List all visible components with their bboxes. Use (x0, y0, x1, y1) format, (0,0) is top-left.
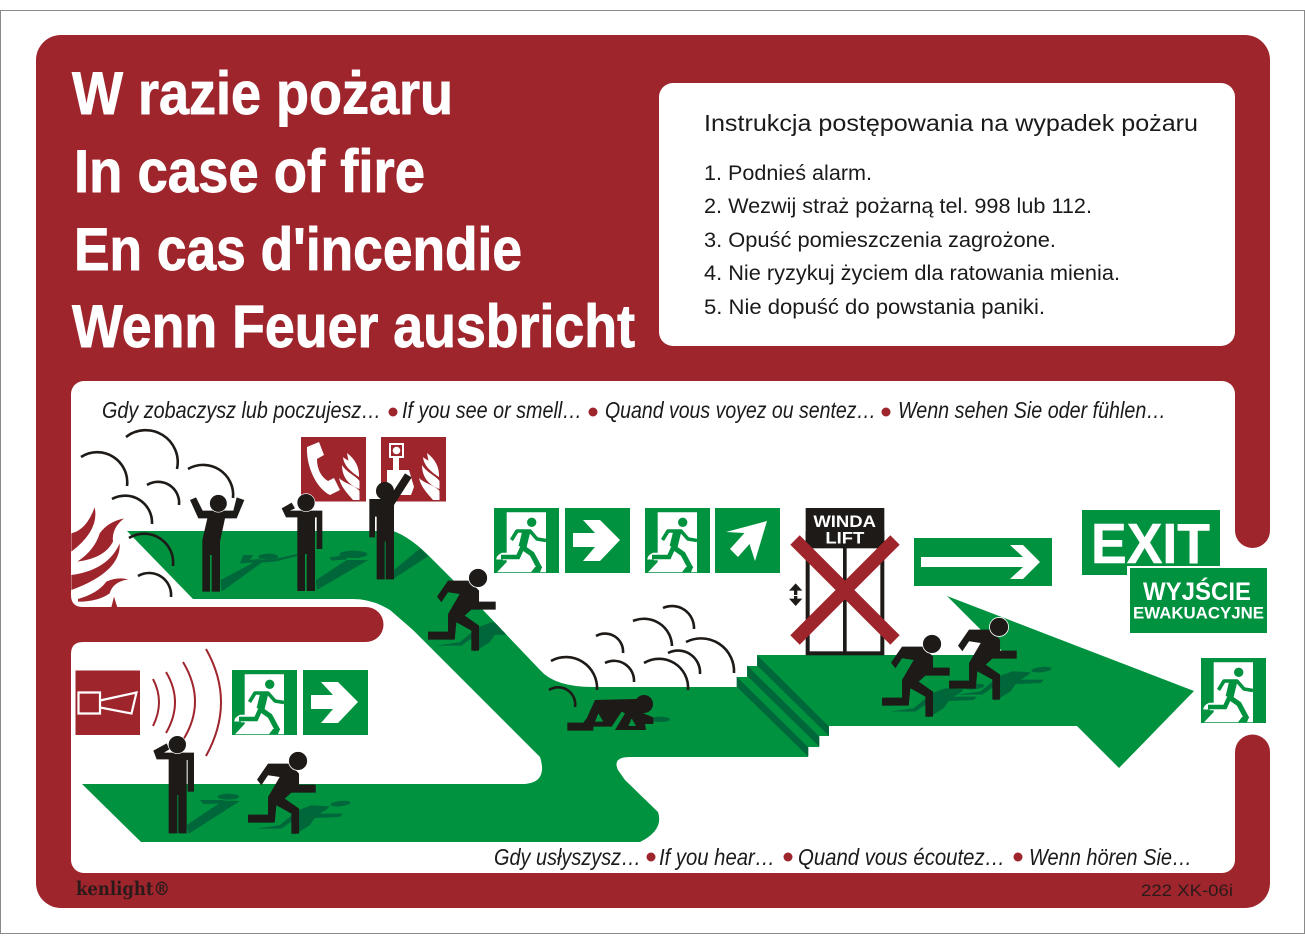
smoke in corridor (549, 606, 734, 707)
icon: WYJSCIE EWAKUACYJNE sign: WYJŚCIE (1143, 576, 1251, 606)
stairs (737, 655, 829, 757)
product code: 222 XK-06i (1141, 881, 1233, 900)
icon: lift with red cross: LIFT (825, 529, 865, 548)
panel: fire instructions: 2. Wezwij straż pożarną tel. 998 lub 112. (704, 195, 1092, 218)
icon: arrow right sign (565, 508, 630, 573)
figures: two runners (882, 617, 1052, 718)
icon: exit sign lower (232, 670, 297, 735)
brand logo: kenlight® (76, 878, 170, 900)
caption: if you hear: Wenn hören Sie… (1029, 844, 1192, 870)
caption: if you see or smell: If you see or smell… (402, 397, 582, 423)
caption: if you see or smell (102, 397, 1166, 423)
red tabs on right edge (1235, 500, 1270, 780)
caption: if you hear: If you hear… (659, 844, 775, 870)
icon: flames (71, 507, 129, 607)
sound waves (153, 649, 221, 756)
figure: runner lower (248, 751, 351, 835)
icon: WYJSCIE EWAKUACYJNE sign: EWAKUACYJNE (1133, 604, 1264, 622)
title: four languages: Wenn Feuer ausbricht (72, 293, 635, 360)
panel: fire instructions: 4. Nie ryzykuj życiem dla ratowania mienia. (704, 262, 1120, 285)
figures on upper route (190, 473, 428, 592)
red divider bar (71, 595, 384, 654)
icon: exit sign upper second (645, 508, 710, 573)
caption: if you see or smell: Quand vous voyez ou sentez… (605, 397, 876, 423)
lower white panel (71, 381, 1275, 873)
icon: WYJSCIE EWAKUACYJNE sign (1127, 566, 1267, 633)
figure: pressing alarm (369, 473, 428, 579)
green evacuation route floor (82, 531, 1194, 842)
icon: alarm horn sign (76, 670, 140, 735)
icon: arrow sign lower (303, 670, 368, 735)
icon: exit sign upper (494, 508, 559, 573)
figure: crawling person (567, 695, 670, 731)
figure: runner on descent (428, 568, 506, 652)
icon: diagonal arrow sign (715, 508, 780, 573)
panel: fire instructions: Instrukcja postępowania na wypadek pożaru (704, 110, 1198, 136)
icon: fire alarm button sign (381, 437, 446, 502)
icon: long arrow sign (914, 538, 1052, 586)
panel: fire instructions: 5. Nie dopuść do powstania paniki. (704, 296, 1045, 319)
figure: arms raised (190, 494, 297, 592)
title: four languages (72, 60, 635, 360)
icon: lift with red cross (789, 508, 895, 653)
title: four languages: En cas d'incendie (74, 216, 522, 283)
smoke near fire (81, 430, 233, 597)
caption: if you hear (494, 844, 1192, 870)
icon: fire telephone sign (301, 437, 366, 502)
figure: phoning (282, 494, 368, 591)
title: four languages: W razie pożaru (72, 60, 453, 127)
panel: fire instructions: 3. Opuść pomieszczenia zagrożone. (704, 229, 1056, 252)
icon: final exit sign (1201, 658, 1266, 723)
panel: fire instructions (659, 83, 1235, 346)
icon: lift with red cross: WINDA (813, 512, 876, 531)
panel: fire instructions: 1. Podnieś alarm. (704, 162, 872, 185)
figure: listening person (153, 736, 240, 834)
caption: if you hear: Gdy usłyszysz… (494, 844, 641, 870)
title: four languages: In case of fire (74, 138, 425, 205)
caption: if you see or smell: Gdy zobaczysz lub poczujesz… (102, 397, 381, 423)
caption: if you hear: Quand vous écoutez… (798, 844, 1005, 870)
caption: if you see or smell: Wenn sehen Sie oder fühlen… (898, 397, 1166, 423)
icon: EXIT sign: EXIT (1091, 512, 1210, 576)
